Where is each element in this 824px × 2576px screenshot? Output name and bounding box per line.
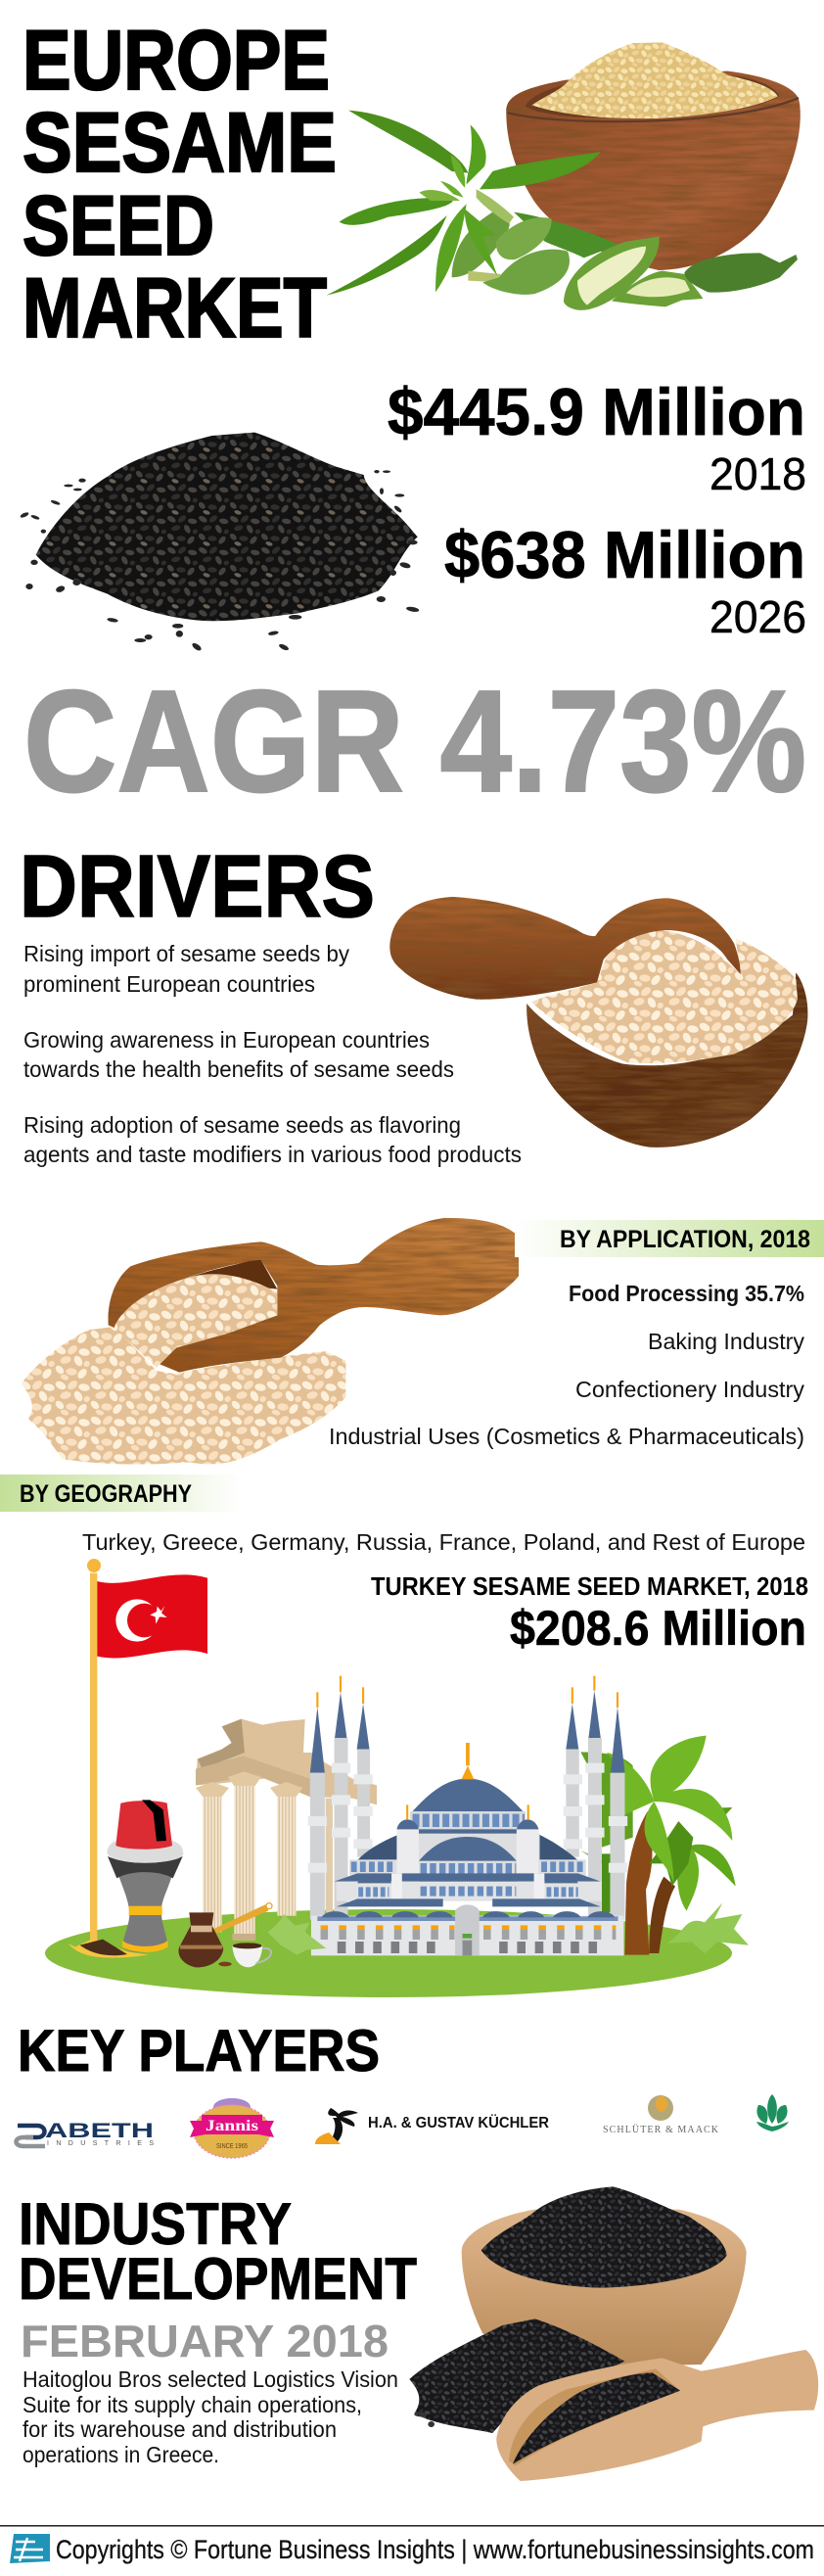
application list: Industrial Uses (Cosmetics & Pharmaceuticals)	[329, 1424, 804, 1449]
geography heading: BY GEOGRAPHY	[20, 1480, 192, 1508]
ruined columns	[196, 1719, 377, 1941]
application list	[329, 1281, 805, 1449]
logo: H.A. & Gustav Kuchler	[315, 2108, 549, 2144]
2018 label: 2018	[710, 448, 806, 499]
2018 market value: $445.9 Million	[388, 375, 805, 449]
heading: drivers: DRIVERS	[20, 838, 375, 936]
logo: Schluter and Maack: SCHLÜTER & MAACK	[603, 2124, 719, 2135]
logo: green plant mark	[756, 2094, 789, 2131]
minarets	[308, 1676, 627, 1921]
fez on drum	[69, 1800, 183, 1958]
development text: operations in Greece.	[23, 2442, 219, 2467]
title: MARKET	[23, 261, 327, 355]
photo: bowl and scoop of black sesame	[409, 2186, 818, 2481]
heading: key players: KEY PLAYERS	[18, 2018, 380, 2084]
heading: industry development: DEVELOPMENT	[19, 2246, 417, 2312]
photo: wooden bowl with sesame plant	[326, 42, 801, 310]
application band	[515, 1220, 824, 1257]
drivers list: prominent European countries	[23, 971, 315, 997]
application list: Confectionery Industry	[575, 1377, 804, 1402]
photo: dark bowl and spoon with white sesame	[389, 897, 807, 1147]
small bush	[267, 1914, 326, 1955]
logo: Jannis: SINCE 1965	[216, 2143, 248, 2150]
drivers list: towards the health benefits of sesame seeds	[23, 1056, 454, 1082]
development text	[23, 2366, 398, 2467]
application list: Baking Industry	[648, 1329, 805, 1354]
development text: Suite for its supply chain operations,	[23, 2392, 362, 2417]
development text: Haitoglou Bros selected Logistics Vision	[23, 2366, 398, 2392]
drivers list	[23, 941, 522, 1167]
photo: wooden scoop with white sesame pile	[22, 1218, 519, 1465]
drivers list: Rising adoption of sesame seeds as flavoring	[23, 1112, 461, 1138]
ground	[45, 1909, 732, 1997]
logo: Jannis: Jannis	[206, 2118, 258, 2134]
coffee cup	[218, 1943, 271, 1967]
icon: Fortune Business Insights logo	[10, 2534, 50, 2563]
drivers list: Growing awareness in European countries	[23, 1027, 430, 1053]
development text: for its warehouse and distribution	[23, 2416, 337, 2442]
panel: by application	[329, 1220, 824, 1449]
logos: key players	[16, 2094, 789, 2158]
logo: Dabeth Industries: INDUSTRIES	[47, 2140, 154, 2147]
panel: by geography	[0, 1475, 808, 1656]
foreground props	[69, 1559, 326, 1967]
geography list: Turkey, Greece, Germany, Russia, France, Poland, and Rest of Europe	[82, 1529, 805, 1555]
2026 market value: $638 Million	[444, 518, 805, 592]
logo: Dabeth Industries	[16, 2120, 154, 2147]
base facade	[311, 1916, 623, 1955]
flag	[87, 1559, 207, 1944]
logo: Schluter and Maack	[603, 2095, 719, 2135]
illustration: Turkey landmarks	[45, 1559, 749, 1997]
development date: FEBRUARY 2018	[21, 2316, 389, 2366]
application heading: BY APPLICATION, 2018	[560, 1226, 810, 1253]
market size figures	[388, 375, 806, 642]
mosque	[308, 1676, 627, 1955]
drivers list: agents and taste modifiers in various food products	[23, 1142, 522, 1167]
coffee pot	[178, 1903, 272, 1967]
logo: Jannis	[190, 2098, 274, 2158]
heading: industry development: INDUSTRY	[19, 2191, 292, 2257]
logo: H.A. & Gustav Kuchler: H.A. & GUSTAV KÜCHLER	[368, 2113, 549, 2131]
side domes	[357, 1834, 399, 1860]
wings	[349, 1859, 396, 1883]
application list: Food Processing 35.7%	[569, 1281, 804, 1306]
main dome	[413, 1779, 523, 1811]
geography band	[0, 1475, 242, 1512]
title	[23, 14, 337, 355]
heading: industry development	[19, 2191, 417, 2312]
title: SESAME	[23, 96, 337, 190]
footer rule	[0, 2525, 824, 2526]
footer	[0, 2525, 824, 2564]
drivers list: Rising import of sesame seeds by	[23, 941, 349, 966]
title: SEED	[23, 179, 214, 273]
logo: Dabeth Industries: ABETH	[45, 2120, 154, 2142]
turkey market value: $208.6 Million	[510, 1601, 806, 1656]
palm tree	[580, 1736, 749, 1955]
photo: black sesame seed pile	[20, 433, 420, 652]
title: EUROPE	[23, 14, 330, 108]
2026 label: 2026	[710, 591, 806, 642]
